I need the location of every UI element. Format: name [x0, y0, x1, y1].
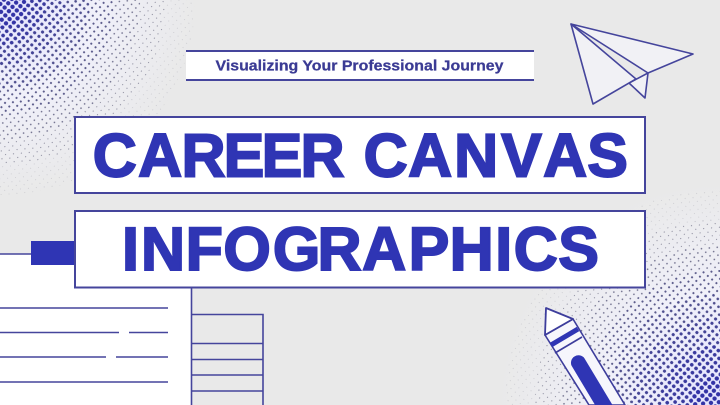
icon: page tabs table: [192, 314, 263, 405]
icon: crayon pen: [545, 308, 625, 405]
halftone: top-left corner: [0, 0, 195, 195]
title box: Infographics: [75, 211, 645, 288]
subtitle banner: [186, 51, 534, 80]
icon: blue clip: [31, 241, 76, 265]
title box: Career Canvas: [75, 117, 645, 193]
icon: notebook page with lines: [0, 254, 192, 405]
title line 2: INFOGRAPHICS: [122, 215, 599, 283]
icon: paper plane: [571, 24, 693, 104]
subtitle text: Visualizing Your Professional Journey: [216, 58, 504, 75]
title line 1: CAREER CANVAS: [93, 121, 628, 189]
halftone: bottom-right corner: [500, 185, 720, 405]
